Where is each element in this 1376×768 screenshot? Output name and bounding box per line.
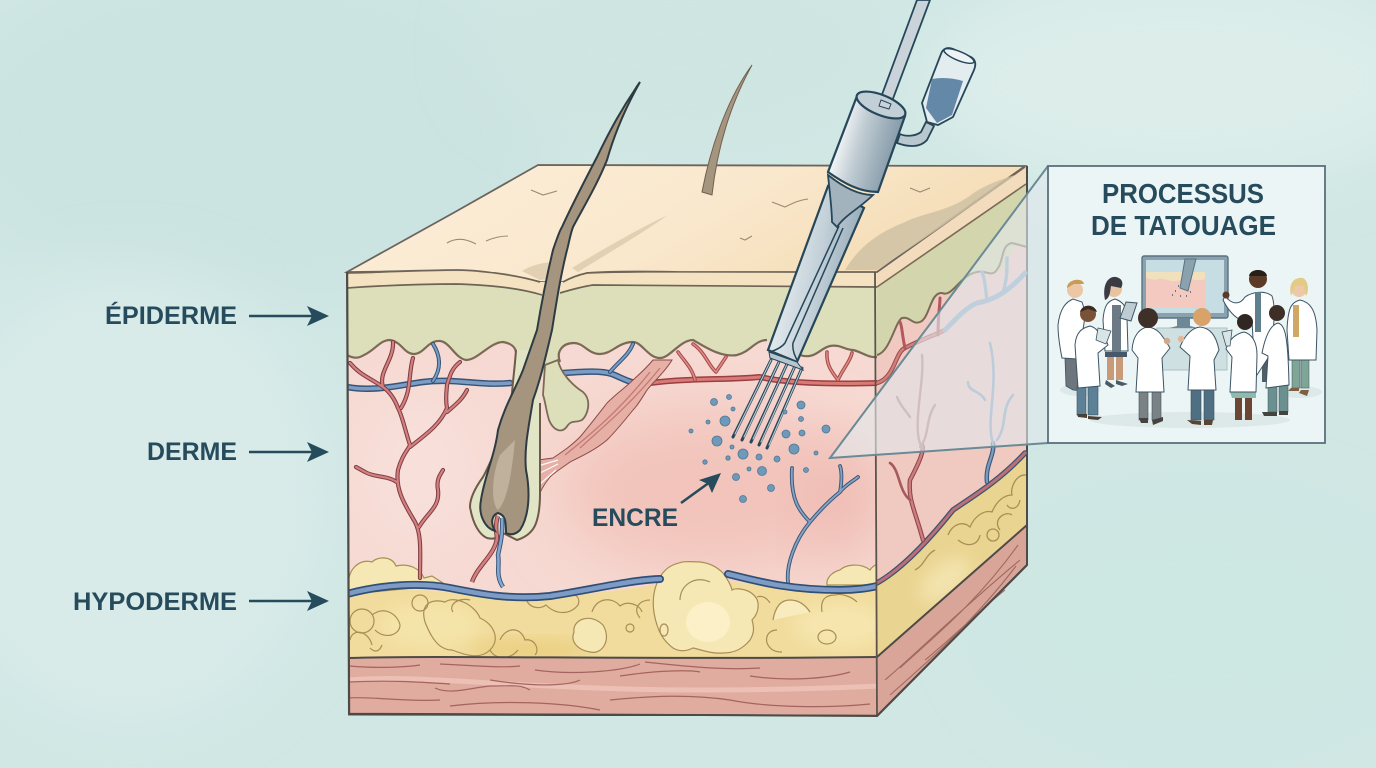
red branching vessels (350, 342, 467, 578)
fat lobes (348, 558, 893, 653)
block outline bottom (347, 272, 1027, 716)
front vertical edge (875, 272, 877, 716)
upper vessel: red right (650, 344, 877, 383)
inset title: PROCESSUS (1102, 178, 1264, 209)
inset title: DE TATOUAGE (1091, 210, 1276, 241)
left edge (347, 272, 877, 716)
scientist: front right (1262, 305, 1289, 416)
scientist: presenter (1222, 270, 1274, 382)
floor shadows (1060, 384, 1322, 428)
arrow: hypoderme (249, 591, 329, 611)
dermis layer (347, 330, 880, 600)
muscle layer (347, 657, 880, 717)
tattoo needle machine (733, 0, 976, 448)
subcutaneous fat layer (347, 558, 893, 660)
ink particles (689, 394, 830, 502)
scientist: woman with clipboard (1103, 277, 1137, 388)
right-face vessels (877, 258, 1025, 583)
epidermis layer (347, 270, 877, 372)
grip cone (828, 175, 873, 227)
right face of block (877, 166, 1027, 716)
ink vial (922, 46, 976, 125)
second hair (702, 65, 752, 195)
scientist: front left (1075, 306, 1111, 420)
label: encre: ENCRE (592, 504, 678, 532)
arrector pili muscle (538, 360, 672, 493)
arrow: derme (249, 442, 329, 462)
arrow: épiderme (249, 306, 329, 326)
feed tube (880, 0, 930, 104)
blood vessels in dermis (347, 342, 877, 597)
needle group (733, 352, 803, 448)
top face of block (347, 165, 1025, 282)
lower vessel (347, 574, 877, 597)
scientist: rear center right (1178, 308, 1219, 425)
right-face fat lobes (915, 475, 1026, 570)
arrow: encre (681, 473, 721, 503)
upper vessel: blue left (347, 344, 640, 389)
monitor showing skin (1142, 256, 1228, 370)
inset panel: processus de tatouage (1048, 166, 1325, 443)
label: épiderme: ÉPIDERME (105, 301, 237, 330)
translucent magnifier callout (830, 166, 1048, 458)
connector pipe (897, 122, 934, 146)
follicle, gland and erector muscle (470, 350, 672, 582)
shaft (768, 186, 864, 362)
sebaceous gland (543, 360, 588, 430)
skin block (347, 65, 1027, 717)
label: hypoderme: HYPODERME (73, 588, 237, 616)
scientist: man with glasses (1058, 280, 1085, 391)
main hair shaft and bulb (480, 82, 640, 587)
root sheath (471, 350, 541, 539)
blue branching vessel (788, 466, 858, 582)
vessels into papilla (472, 516, 498, 582)
label: derme: DERME (147, 438, 237, 466)
main cylinder (828, 96, 905, 192)
inset title (1091, 178, 1276, 241)
scientist: rear center left (1132, 308, 1170, 425)
scientist: blond woman (1287, 278, 1317, 396)
scientist: woman front right (1222, 314, 1257, 420)
